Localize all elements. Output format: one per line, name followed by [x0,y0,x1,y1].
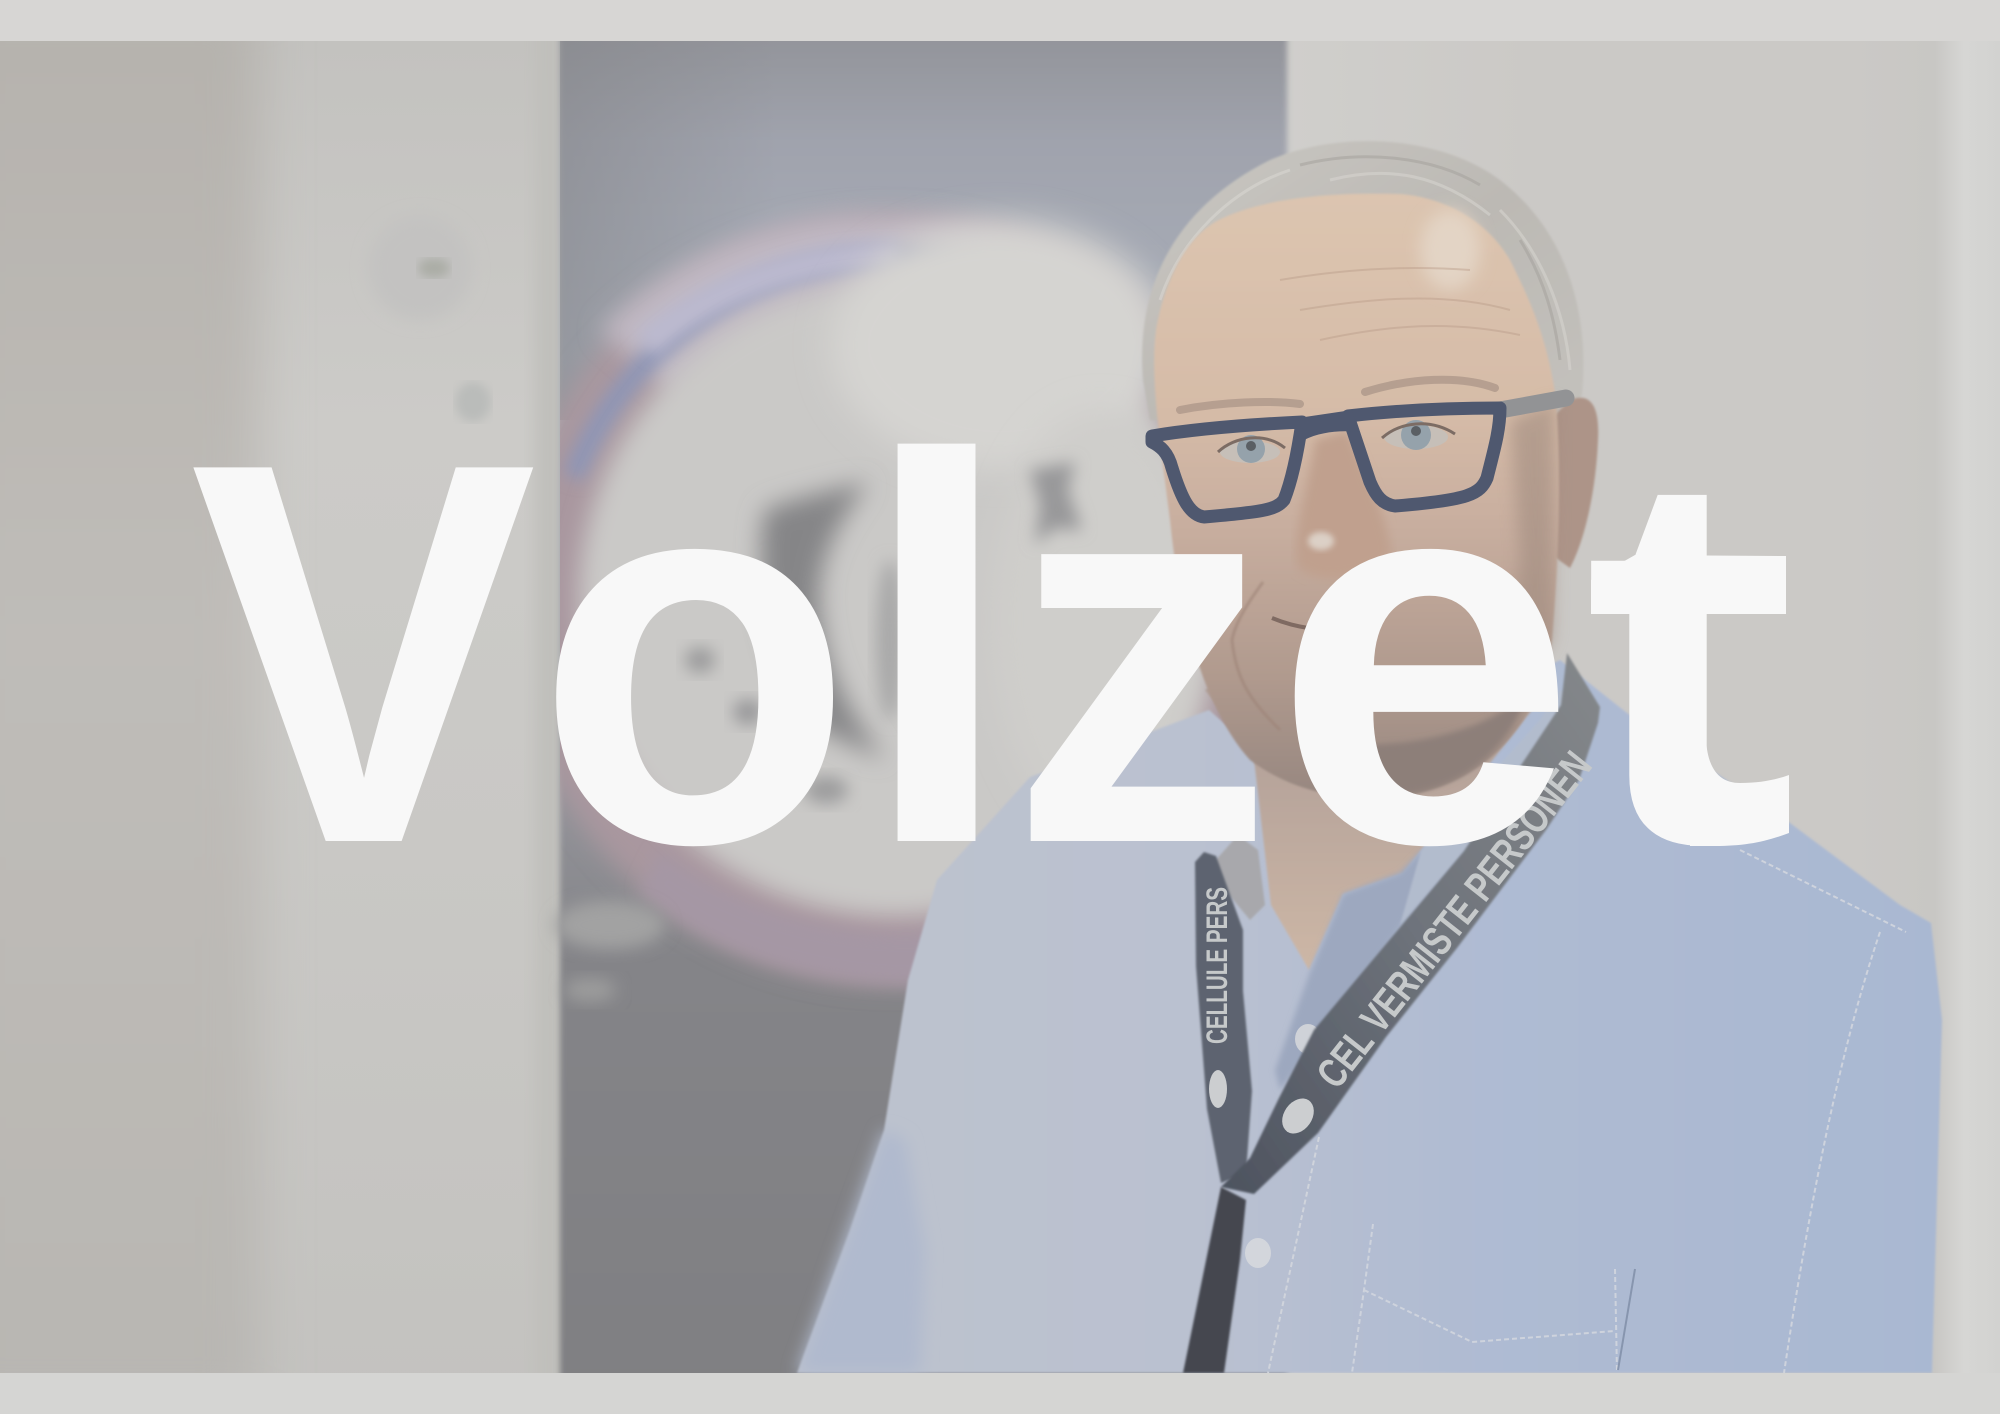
logo emblem shapes [685,462,1082,804]
shirt buttons [1245,1024,1321,1268]
smile crease [1232,582,1280,730]
blurred text on door [555,901,665,1002]
blurred wall fixtures [416,257,491,422]
heading: Volzet: z [1010,350,1274,956]
hair [1142,141,1583,440]
temple arm [1500,398,1566,410]
lanyard left leaf logo [1209,1070,1227,1108]
man in shirt [797,141,1942,1373]
right wall [1291,41,1948,1373]
blurred round logo [560,204,1222,996]
face [1154,194,1559,798]
lanyard right text: CEL VERMISTE PERSONEN [1307,743,1601,1097]
heading: Volzet: l [858,346,1016,958]
heading: Volzet: V [190,350,539,956]
eyes [1218,420,1455,463]
shirt sleeve shade left [797,1130,925,1373]
right face shade [1500,400,1556,720]
left lens frame [1152,422,1302,517]
shirt [797,660,1942,1373]
nose [1296,430,1392,579]
bottom band [0,1373,2000,1414]
right lens frame [1348,408,1500,506]
lanyard right leaf logo [1282,1098,1314,1134]
heading: Volzet [190,346,1789,958]
chin shadow [1360,690,1530,795]
lower ring tint [650,890,909,986]
shirt pocket [1352,1224,1635,1373]
shirt placket stitching [1268,1137,1319,1373]
heading: Volzet: o [536,350,853,956]
dark door panel [560,0,1287,1414]
right collar light side [1401,844,1458,922]
hair strands [1160,157,1570,370]
eyebrows [1180,380,1495,410]
sleeve seam stitching [1740,850,1906,1373]
lanyard left strap [1195,852,1252,1183]
forehead highlight [1420,210,1480,290]
lanyard clip [1183,1187,1246,1373]
mouth [1272,618,1345,630]
collar right [1274,851,1420,1088]
right ear [1545,398,1598,568]
heading: Volzet: e [1273,350,1577,957]
bridge [1298,410,1358,440]
neck [1205,688,1532,970]
top band [0,0,2000,41]
head [1142,141,1598,798]
forehead wrinkles [1280,268,1520,340]
heading: Volzet: t [1584,360,1774,954]
glasses [1152,398,1566,517]
lanyard left text: CELLULE PERS [1201,887,1234,1044]
lanyard right strap [1221,653,1601,1194]
collar left [1217,841,1266,920]
left wall [0,41,561,1373]
